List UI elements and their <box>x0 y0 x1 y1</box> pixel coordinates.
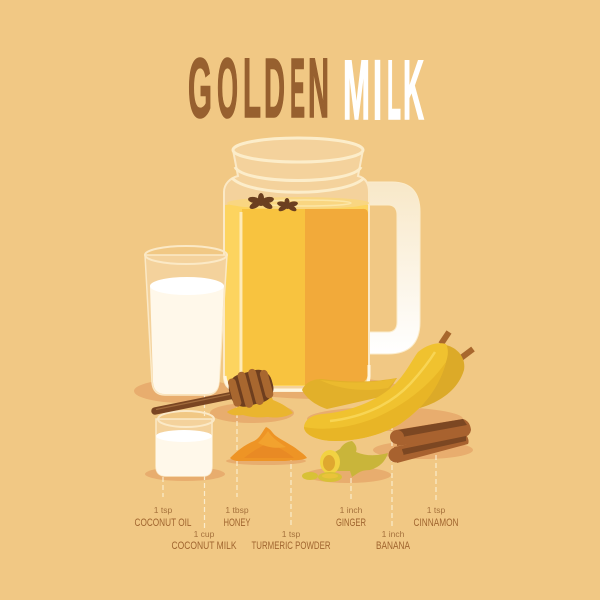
label: ginger: GINGER <box>336 517 366 529</box>
title <box>188 41 424 137</box>
jar rim and neck lines <box>232 138 364 192</box>
label: coconut oil <box>134 505 192 529</box>
label: honey: 1 tbsp <box>225 505 249 515</box>
back banana right <box>380 345 464 408</box>
bananas <box>302 332 473 441</box>
small glass of coconut oil <box>156 411 214 476</box>
turmeric powder <box>230 427 307 461</box>
shadows under ingredients <box>134 377 473 483</box>
label: coconut milk: 1 cup <box>194 529 215 539</box>
title: D <box>264 41 285 135</box>
label: cinnamon: 1 tsp <box>427 505 445 515</box>
title: I <box>373 43 382 137</box>
title: G <box>188 41 212 135</box>
label: coconut oil: COCONUT OIL <box>134 517 192 529</box>
banana underside shade <box>304 362 446 441</box>
honey <box>227 386 293 418</box>
title: L <box>243 41 261 135</box>
upper stick <box>396 419 471 446</box>
tall glass of milk <box>145 246 227 395</box>
honey dipper <box>155 365 277 412</box>
label: cinnamon <box>414 505 459 529</box>
ingredient labels <box>134 505 459 552</box>
star anise small <box>277 198 298 213</box>
jar handle <box>362 182 420 354</box>
label: ginger <box>336 505 366 529</box>
label: banana: BANANA <box>376 540 410 552</box>
label: honey: HONEY <box>224 517 251 529</box>
ginger <box>302 441 388 482</box>
banana stems <box>441 332 473 358</box>
back banana lighter band <box>320 378 397 390</box>
banana highlight <box>330 352 435 421</box>
label: turmeric powder: TURMERIC POWDER <box>252 540 331 552</box>
star anise large <box>248 193 274 211</box>
back banana left <box>302 378 397 409</box>
label: ginger: 1 inch <box>340 505 363 515</box>
label: cinnamon: CINNAMON <box>414 517 459 529</box>
title: O <box>217 41 238 135</box>
star anise <box>248 193 298 213</box>
label: coconut milk <box>172 529 237 552</box>
label: banana <box>376 529 410 552</box>
golden milk liquid <box>225 197 369 386</box>
jar glass body <box>224 138 369 391</box>
front banana <box>304 343 448 441</box>
label: turmeric powder: 1 tsp <box>282 529 300 539</box>
label: honey <box>224 505 251 529</box>
label: turmeric powder <box>252 529 331 552</box>
title: E <box>290 41 305 135</box>
dashed leader lines <box>163 395 436 528</box>
jar base outline <box>225 365 369 390</box>
label: coconut oil: 1 tsp <box>154 505 172 515</box>
label: banana: 1 inch <box>382 529 405 539</box>
title: L <box>387 43 401 137</box>
jar glass highlight <box>241 212 254 388</box>
title: M <box>343 43 370 137</box>
infographic canvas: K <box>403 43 424 137</box>
cinnamon sticks <box>388 419 471 463</box>
lower stick <box>394 433 469 463</box>
jar of golden milk <box>224 138 420 391</box>
title: N <box>308 41 329 135</box>
label: coconut milk: COCONUT MILK <box>172 540 237 552</box>
